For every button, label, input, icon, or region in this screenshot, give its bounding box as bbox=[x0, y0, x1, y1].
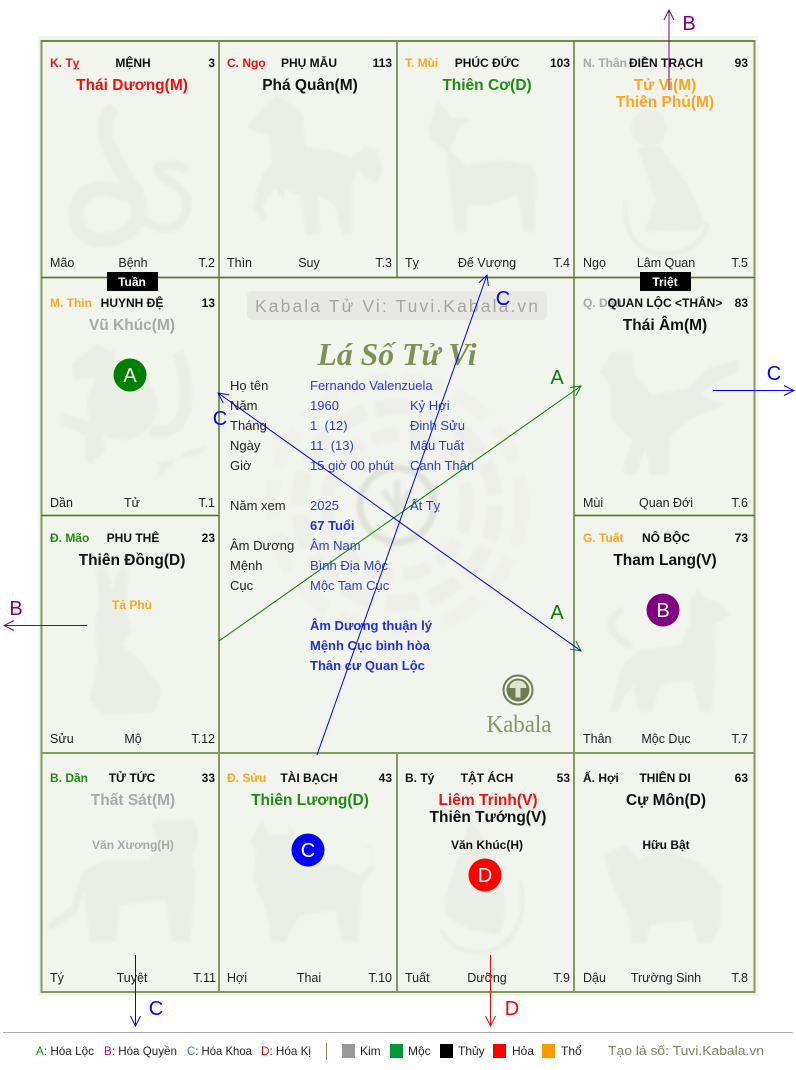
birth info block: Năm xem bbox=[230, 498, 286, 513]
icon: bagua watermark bbox=[272, 380, 522, 630]
palace: Quan Lộc: QUAN LỘC <THÂN> bbox=[608, 295, 722, 310]
arrow: D down: D bbox=[505, 998, 519, 1020]
palace: Mệnh: 3 bbox=[208, 56, 215, 70]
palace: Quan Lộc bbox=[583, 295, 748, 510]
palace: Phúc Đức: Đế Vượng bbox=[458, 256, 516, 270]
palace: Phụ Mẫu: C. Ngọ bbox=[227, 56, 266, 70]
palace: Quan Lộc: Q. Dậu bbox=[583, 296, 622, 310]
palace: Phúc Đức: Thiên Cơ(D) bbox=[442, 77, 532, 94]
palace: Điền Trạch: N. Thân bbox=[583, 56, 627, 70]
palace: Tài Bạch bbox=[227, 770, 392, 985]
palace: Phụ Mẫu: T.3 bbox=[375, 256, 392, 270]
palace: Phụ Mẫu: Suy bbox=[298, 256, 321, 270]
palace: Phụ Mẫu: 113 bbox=[373, 56, 392, 70]
marker: C circle bbox=[292, 834, 324, 866]
palace: Tử Tức: T.11 bbox=[193, 971, 216, 985]
Kabala logo bbox=[486, 676, 552, 738]
marker: D circle bbox=[468, 858, 502, 892]
palace: Tật Ách: Tuất bbox=[405, 971, 430, 985]
birth info block: Mộc Tam Cục bbox=[310, 578, 390, 593]
arrow: C diagonal left: C bbox=[213, 408, 227, 430]
palace: Huynh Đệ bbox=[50, 295, 215, 510]
marker: C circle: C bbox=[301, 840, 315, 862]
icon: tiger bbox=[48, 820, 199, 942]
icon: buffalo bbox=[250, 820, 374, 942]
palace: Mệnh: MỆNH bbox=[115, 55, 151, 70]
zodiac watermarks bbox=[48, 95, 740, 952]
icon: rabbit bbox=[90, 565, 162, 715]
legend: transformations: A: Hóa Lộc bbox=[36, 1044, 94, 1058]
palace: Phúc Đức: Tỵ bbox=[405, 256, 420, 270]
palace: Điền Trạch bbox=[583, 55, 748, 270]
palace: Tài Bạch: Hợi bbox=[227, 971, 247, 985]
palace: Tài Bạch: Đ. Sửu bbox=[227, 771, 266, 785]
palace: Phu Thê: PHU THÊ bbox=[107, 530, 159, 545]
badge: Triệt: Triệt bbox=[652, 275, 678, 289]
palace: Tật Ách: TẬT ÁCH bbox=[461, 770, 513, 785]
palace: Tài Bạch: TÀI BẠCH bbox=[280, 770, 338, 785]
palace: Thiên Di: Hữu Bật bbox=[642, 838, 690, 852]
arrow: D down bbox=[490, 955, 519, 1026]
palace: Phúc Đức: T.4 bbox=[553, 256, 570, 270]
palace: Tật Ách: T.9 bbox=[553, 971, 570, 985]
icon: rat bbox=[442, 820, 523, 952]
birth info block: Mệnh Cục bình hòa bbox=[310, 638, 431, 653]
palace: Phúc Đức: PHÚC ĐỨC bbox=[455, 55, 520, 70]
icon: goat bbox=[428, 100, 536, 232]
palace: Phụ Mẫu: Thìn bbox=[227, 256, 252, 270]
birth info block: Giờ bbox=[230, 458, 252, 473]
arrow: C down: C bbox=[149, 998, 163, 1020]
palace: Nô Bộc: Thân bbox=[583, 732, 612, 746]
palace: Thiên Di: Cự Môn(D) bbox=[626, 792, 706, 809]
palace: Tài Bạch: Thiên Lương(D) bbox=[251, 792, 369, 809]
legend: elements bbox=[342, 1044, 582, 1058]
birth info block: Âm Dương thuận lý bbox=[310, 618, 433, 633]
palace: Phu Thê: Tả Phù bbox=[112, 598, 152, 612]
palace: Nô Bộc: NÔ BỘC bbox=[642, 530, 690, 545]
palace: Phúc Đức: T. Mùi bbox=[405, 56, 438, 70]
palace: Thiên Di: Trường Sinh bbox=[631, 971, 701, 985]
palace: Điền Trạch: Ngọ bbox=[583, 256, 606, 270]
palace: Nô Bộc: Mộc Dục bbox=[641, 732, 691, 746]
palace: Tật Ách bbox=[405, 770, 570, 985]
palace: Huynh Đệ: M. Thìn bbox=[50, 296, 92, 310]
palace: Huynh Đệ: Vũ Khúc(M) bbox=[89, 317, 175, 334]
arrow: C down bbox=[136, 955, 163, 1026]
palace: Thiên Di bbox=[583, 770, 748, 985]
arrow: B up bbox=[669, 10, 696, 90]
palace: Tử Tức: 33 bbox=[202, 771, 215, 785]
palace: Tài Bạch: T.10 bbox=[368, 971, 392, 985]
icon: dragon bbox=[60, 345, 208, 482]
palace: Nô Bộc: G. Tuất bbox=[583, 531, 623, 545]
palace: Phu Thê: Mộ bbox=[124, 732, 142, 746]
marker: B circle bbox=[646, 594, 680, 626]
birth info block: Cục bbox=[230, 578, 254, 593]
arrow: C diagonal left bbox=[213, 393, 581, 651]
badge: Tuần: Tuần bbox=[118, 275, 146, 289]
birth info block: 1960 bbox=[310, 398, 339, 413]
arrow: B up: B bbox=[682, 13, 696, 35]
palace: Thiên Di: Ấ. Hợi bbox=[583, 770, 619, 785]
palace: Phụ Mẫu: Phá Quân(M) bbox=[262, 77, 358, 94]
birth info block: Tháng bbox=[230, 418, 267, 433]
palace: Nô Bộc bbox=[583, 530, 748, 746]
icon: rooster bbox=[600, 352, 740, 475]
palace: Mệnh: Thái Dương(M) bbox=[76, 77, 188, 94]
palace: Tật Ách: B. Tý bbox=[405, 771, 435, 785]
legend: elements: Hỏa bbox=[512, 1044, 534, 1058]
icon: pig bbox=[604, 845, 722, 943]
icon: snake bbox=[76, 112, 186, 240]
palace: Tật Ách: Liêm Trinh(V) bbox=[438, 792, 538, 809]
palace: Tử Tức: B. Dần bbox=[50, 771, 88, 785]
palace: Phu Thê: 23 bbox=[202, 531, 215, 545]
arrow: B left: B bbox=[9, 598, 23, 620]
arrow: A green diagonal bbox=[219, 367, 581, 641]
arrow: C right bbox=[713, 363, 794, 390]
palace: Tử Tức: Thất Sát(M) bbox=[91, 792, 175, 809]
marker: A circle: A bbox=[123, 365, 137, 387]
birth info block: 67 Tuổi bbox=[310, 518, 355, 533]
legend: transformations bbox=[36, 1044, 311, 1058]
badge: Triệt bbox=[640, 272, 691, 291]
palace: Huynh Đệ: Tử bbox=[124, 496, 140, 510]
marker: A circle bbox=[114, 358, 146, 392]
palace: Điền Trạch: T.5 bbox=[731, 256, 748, 270]
palace: Tật Ách: Văn Khúc(H) bbox=[451, 838, 523, 852]
birth info block: Canh Thân bbox=[410, 458, 474, 473]
badge: Tuần bbox=[107, 272, 158, 291]
palace: Tài Bạch: 43 bbox=[379, 771, 392, 785]
palace: Phu Thê: Đ. Mão bbox=[50, 531, 89, 545]
palace: Quan Lộc: 83 bbox=[735, 296, 748, 310]
palace: Thiên Di: Dậu bbox=[583, 971, 606, 985]
palace: Mệnh: Bệnh bbox=[118, 256, 148, 270]
palace: Quan Lộc: T.6 bbox=[731, 496, 748, 510]
legend: elements: Thổ bbox=[561, 1044, 582, 1058]
arrow: C diagonal up: C bbox=[496, 288, 510, 310]
arrow: A lower green head bbox=[550, 602, 581, 651]
palace: Tử Tức bbox=[50, 770, 216, 985]
palace: Tử Tức: Văn Xương(H) bbox=[92, 838, 174, 852]
birth info block: Kỷ Hợi bbox=[410, 398, 450, 413]
arrow: A green diagonal: A bbox=[550, 367, 564, 389]
legend: transformations: D: Hóa Kị bbox=[261, 1044, 311, 1058]
legend divider bbox=[326, 1043, 328, 1060]
legend: transformations: B: Hóa Quyền bbox=[104, 1044, 177, 1058]
birth info block: Âm Dương bbox=[230, 538, 294, 553]
palace: Huynh Đệ: T.1 bbox=[198, 496, 215, 510]
birth info block: Năm bbox=[230, 398, 257, 413]
birth info block: Họ tên bbox=[230, 378, 268, 393]
palace: Huynh Đệ: Dần bbox=[50, 496, 73, 510]
palace: Tài Bạch: Thai bbox=[297, 971, 321, 985]
birth info block: Âm Nam bbox=[310, 538, 361, 553]
icon: horse bbox=[248, 95, 382, 235]
palace: Mệnh: T.2 bbox=[198, 256, 215, 270]
palace: Tật Ách: Dưỡng bbox=[467, 971, 507, 985]
palace: Điền Trạch: Lâm Quan bbox=[637, 256, 695, 270]
arrow: B left bbox=[4, 598, 87, 626]
palace grid bbox=[41, 41, 755, 992]
palace: Tật Ách: Thiên Tướng(V) bbox=[430, 809, 546, 826]
footer rule bbox=[3, 1032, 793, 1034]
arrow: A lower green head: A bbox=[550, 602, 564, 624]
palace: Quan Lộc: Quan Đới bbox=[639, 496, 693, 510]
birth info block: Mậu Tuất bbox=[410, 438, 465, 453]
watermark banner bbox=[247, 291, 547, 320]
palace: Điền Trạch: 93 bbox=[735, 56, 748, 70]
palace: Quan Lộc: Thái Âm(M) bbox=[623, 316, 707, 334]
birth info block: 15 giờ 00 phút bbox=[310, 458, 394, 473]
palace: Phụ Mẫu bbox=[227, 55, 392, 270]
palace: Thiên Di: THIÊN DI bbox=[639, 770, 691, 785]
palace: Mệnh: K. Tỵ bbox=[50, 56, 80, 70]
palace: Phúc Đức bbox=[405, 55, 570, 270]
palace: Thiên Di: 63 bbox=[735, 771, 748, 785]
palace: Quan Lộc: Mùi bbox=[583, 496, 603, 510]
watermark banner: Kabala Tử Vi: Tuvi.Kabala.vn bbox=[255, 296, 538, 316]
birth info block: Bình Địa Mộc bbox=[310, 558, 389, 573]
palace: Huynh Đệ: 13 bbox=[202, 296, 215, 310]
birth info block: Ngày bbox=[230, 438, 261, 453]
birth info block: Fernando Valenzuela bbox=[310, 378, 433, 393]
palace: Tật Ách: 53 bbox=[557, 771, 570, 785]
palace: Nô Bộc: Tham Lang(V) bbox=[613, 552, 717, 569]
legend: elements: Thủy bbox=[458, 1044, 485, 1058]
legend: transformations: C: Hóa Khoa bbox=[187, 1044, 252, 1058]
palace: Nô Bộc: T.7 bbox=[731, 732, 748, 746]
palace: Phúc Đức: 103 bbox=[550, 56, 570, 70]
palace: Huynh Đệ: HUYNH ĐỆ bbox=[101, 295, 163, 310]
palace: Mệnh bbox=[50, 55, 215, 270]
palace: Mệnh: Mão bbox=[50, 256, 74, 270]
Kabala logo: Kabala bbox=[486, 712, 552, 738]
palace: Nô Bộc: 73 bbox=[735, 531, 748, 545]
palace: Thiên Di: T.8 bbox=[731, 971, 748, 985]
icon: monkey bbox=[625, 110, 707, 254]
marker: B circle: B bbox=[656, 600, 670, 622]
birth info block bbox=[230, 378, 474, 673]
legend: elements: Mộc bbox=[408, 1044, 431, 1058]
birth info block: 2025 bbox=[310, 498, 339, 513]
birth info block: Thân cư Quan Lộc bbox=[310, 658, 425, 673]
credit: Tạo lá số: Tuvi.Kabala.vn bbox=[608, 1043, 764, 1058]
palace: Phu Thê: Sửu bbox=[50, 732, 74, 746]
palace: Điền Trạch: Tử Vi(M) bbox=[634, 77, 696, 94]
birth info block: Mệnh bbox=[230, 558, 263, 573]
birth info block: Đinh Sửu bbox=[410, 418, 465, 433]
palace: Tử Tức: Tuyệt bbox=[117, 971, 148, 985]
birth info block: 1 (12) bbox=[310, 418, 348, 433]
title: Lá Số Tử Vi bbox=[317, 336, 477, 372]
palace: Điền Trạch: Thiên Phủ(M) bbox=[616, 94, 714, 111]
palace: Phu Thê bbox=[50, 530, 215, 746]
arrow: C right: C bbox=[767, 363, 781, 385]
legend: elements: Kim bbox=[360, 1044, 381, 1058]
arrow: C diagonal up bbox=[317, 275, 510, 755]
palace: Phu Thê: Thiên Đồng(D) bbox=[79, 552, 185, 569]
palace: Điền Trạch: ĐIỀN TRẠCH bbox=[629, 55, 703, 70]
birth info block: Ất Tỵ bbox=[410, 498, 441, 513]
palace: Phu Thê: T.12 bbox=[191, 732, 215, 746]
marker: D circle: D bbox=[478, 865, 492, 887]
palace: Phụ Mẫu: PHỤ MẪU bbox=[281, 55, 337, 70]
birth info block: 11 (13) bbox=[310, 438, 354, 453]
palace: Tử Tức: TỬ TỨC bbox=[109, 770, 156, 785]
palace: Tử Tức: Tý bbox=[50, 971, 65, 985]
icon: dog bbox=[610, 590, 732, 712]
